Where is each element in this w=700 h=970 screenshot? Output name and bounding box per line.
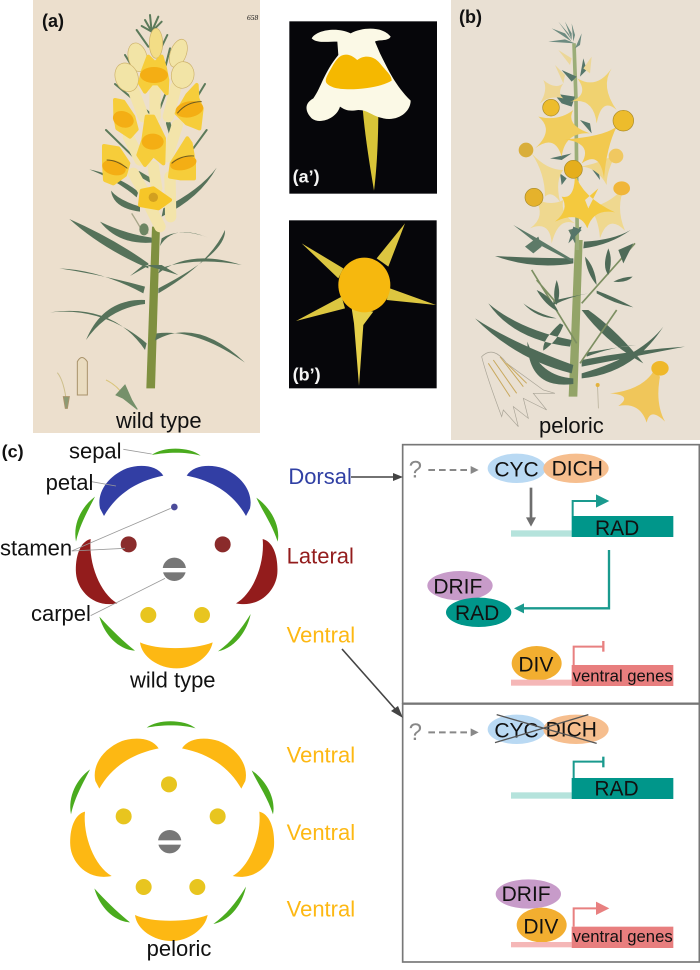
label: (b): (b) bbox=[459, 7, 482, 27]
unknown upstream signal: ? bbox=[409, 719, 422, 746]
arrow: Dorsal to dorsal panel bbox=[351, 473, 403, 481]
DIV protein: DIV bbox=[523, 915, 558, 938]
peloric bottom petal bbox=[135, 915, 208, 941]
panel: (c) floral diagrams bbox=[0, 438, 355, 961]
RAD gene: RAD bbox=[595, 517, 639, 540]
panel: (a') wild type flower photo bbox=[289, 21, 437, 194]
peloric upper petals bbox=[95, 739, 246, 789]
sepals bbox=[75, 449, 278, 651]
ventral genes active: ventral genes bbox=[573, 927, 673, 946]
icon: peloric flower spurs bbox=[296, 223, 436, 321]
peloric side petals bbox=[70, 812, 274, 877]
ventral petal bbox=[140, 642, 213, 668]
arrow: Ventral to ventral panel bbox=[342, 649, 403, 718]
activation arrow to RAD promoter bbox=[526, 488, 536, 527]
icon: wild type floral dissection details bbox=[57, 357, 137, 409]
icon: wild type flower corolla bbox=[306, 29, 411, 121]
crossed out CYC and DICH bbox=[488, 715, 609, 744]
RAD output arrow bbox=[514, 550, 609, 613]
DRIF protein bbox=[496, 879, 561, 909]
DRIF protein bbox=[427, 571, 493, 600]
crossed out CYC and DICH: DICH bbox=[546, 719, 597, 742]
diagram labels: sepal bbox=[69, 438, 122, 463]
label: Lateral: Lateral bbox=[287, 543, 354, 568]
DICH protein: DICH bbox=[552, 458, 603, 481]
RAD protein: RAD bbox=[455, 602, 499, 625]
diagram labels: stamen bbox=[0, 536, 72, 561]
icon: wild type flower spike bbox=[101, 15, 207, 227]
crossed out CYC and DICH: CYC bbox=[494, 719, 539, 742]
lateral petals bbox=[76, 539, 277, 604]
CYC protein bbox=[488, 454, 546, 483]
peloric carpel bbox=[157, 830, 183, 853]
floral diagram: peloric bbox=[70, 721, 274, 961]
panel: (a) wild type plant illustration bbox=[33, 0, 260, 433]
unknown upstream signal: ? bbox=[409, 457, 422, 484]
label: (a): (a) bbox=[42, 11, 64, 31]
icon: peloric floral dissection sketch bbox=[482, 352, 600, 427]
RAD gene bbox=[511, 494, 673, 540]
icon: detached peloric flower bbox=[610, 361, 669, 423]
ventral genes repressed bbox=[511, 641, 673, 686]
panel: (b) peloric plant illustration bbox=[451, 0, 700, 440]
panel: (c) floral diagrams: (c) bbox=[2, 441, 24, 461]
label: Ventral (wild type): Ventral bbox=[287, 623, 355, 648]
icon: flower spur bbox=[363, 108, 378, 191]
unknown upstream signal bbox=[409, 719, 479, 746]
peloric stamens bbox=[116, 776, 226, 895]
diagram labels: carpel bbox=[31, 601, 91, 626]
panel: ventral gene regulation bbox=[403, 704, 699, 962]
CYC protein: CYC bbox=[494, 459, 539, 482]
label: Ventral (peloric top): Ventral bbox=[287, 743, 355, 768]
diagram labels bbox=[0, 438, 216, 693]
label: wild type: wild type bbox=[115, 408, 202, 433]
icon: peloric stem and leaves bbox=[475, 225, 685, 397]
panel: dorsal gene regulation bbox=[403, 445, 699, 703]
label: Dorsal: Dorsal bbox=[288, 464, 352, 489]
DIV protein bbox=[512, 646, 562, 681]
label: peloric: peloric bbox=[539, 413, 604, 438]
diagram labels: petal bbox=[46, 470, 93, 495]
label: Ventral (peloric middle): Ventral bbox=[287, 820, 355, 845]
RAD gene repressed: RAD bbox=[594, 778, 639, 801]
DRIF protein: DRIF bbox=[433, 575, 482, 598]
leader lines bbox=[72, 449, 171, 616]
DICH protein bbox=[543, 454, 609, 483]
dorsal petals bbox=[99, 466, 251, 516]
icon: peloric flower spike bbox=[519, 22, 634, 250]
DIV protein: DIV bbox=[518, 654, 553, 677]
peloric sepals bbox=[70, 721, 274, 924]
label: Ventral (peloric bottom): Ventral bbox=[287, 897, 355, 922]
label: (a'): (a’) bbox=[293, 167, 320, 187]
DRIF protein: DRIF bbox=[502, 883, 551, 906]
icon: wild type stem and leaves bbox=[50, 168, 245, 388]
stamens bbox=[121, 504, 231, 623]
plate number: 658 bbox=[247, 13, 258, 22]
icon: peloric flower centre bbox=[338, 258, 390, 312]
icon: flower yellow palate bbox=[326, 55, 392, 89]
RAD gene repressed bbox=[511, 757, 673, 801]
RAD protein bbox=[446, 598, 511, 627]
label: (b'): (b’) bbox=[293, 365, 321, 385]
floral diagram: wild type bbox=[0, 438, 278, 693]
label: peloric diagram: peloric bbox=[147, 936, 211, 961]
unknown upstream signal bbox=[409, 457, 479, 484]
DIV protein bbox=[517, 908, 567, 942]
carpel bbox=[162, 558, 187, 581]
panel: (b') peloric flower photo bbox=[289, 220, 437, 388]
ventral genes active bbox=[511, 902, 673, 948]
diagram labels: wild type bbox=[129, 668, 216, 693]
ventral genes repressed: ventral genes bbox=[573, 666, 673, 685]
